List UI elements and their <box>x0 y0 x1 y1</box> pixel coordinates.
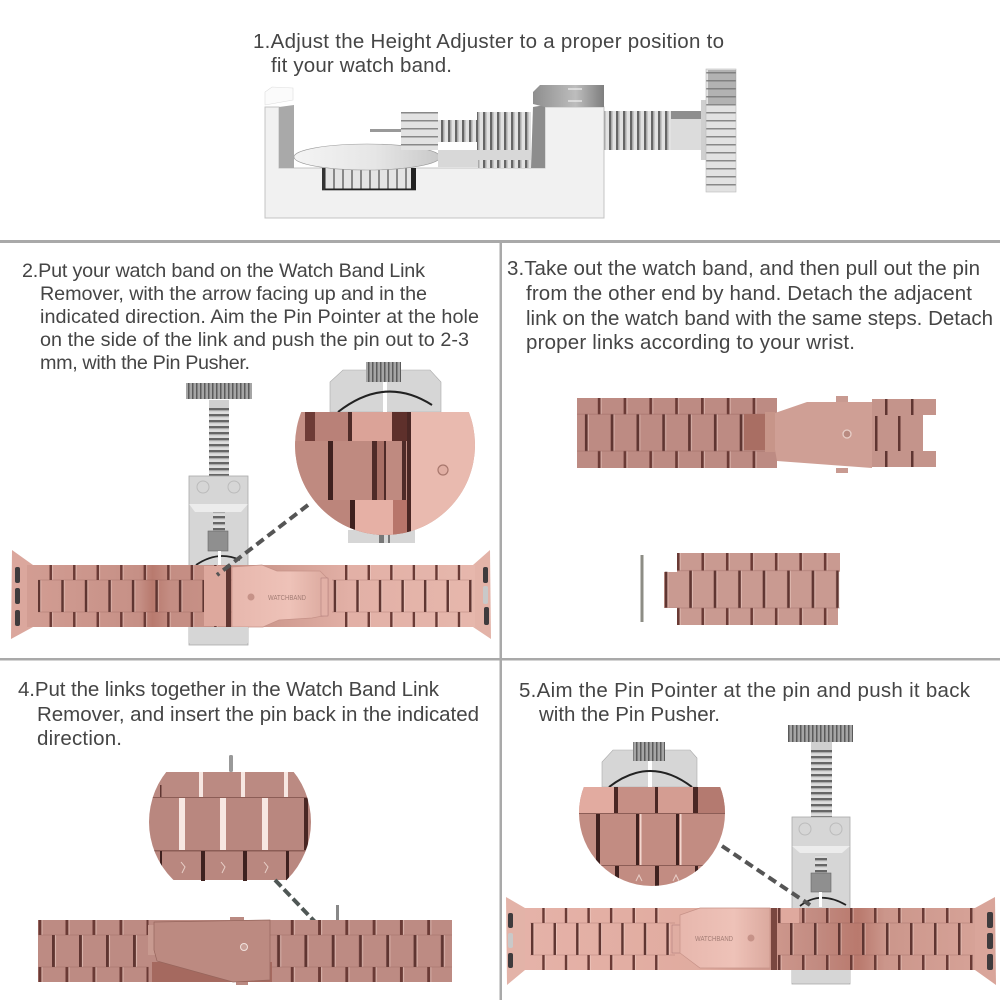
panel: step 5 <box>506 679 996 985</box>
text: step 4 instruction <box>18 678 479 750</box>
illustration: removed pin <box>640 555 644 622</box>
text: step 2 instruction: Remover, with the arrow facing up and in the <box>40 283 427 305</box>
panel: step 1 <box>253 30 736 218</box>
text: step 5 instruction: 5.Aim the Pin Pointer at the pin and push it back <box>519 679 971 702</box>
illustration: full band with clasp <box>577 396 936 473</box>
text: step 1 instruction: fit your watch band. <box>271 54 452 77</box>
illustration: watch band with clasp: WATCHBAND <box>695 936 733 943</box>
illustration: watch band with clasp <box>11 550 491 643</box>
callout: magnified links with dashed pointer <box>578 742 810 905</box>
text: step 3 instruction <box>507 257 993 354</box>
callout: magnified link with dashed pointer <box>217 362 481 575</box>
text: step 3 instruction: 3.Take out the watch band, and then pull out the pin <box>507 257 980 280</box>
panel: step 3 <box>507 257 993 625</box>
text: step 3 instruction: proper links according to your wrist. <box>526 331 855 354</box>
illustration: watch band with clasp <box>506 897 996 985</box>
illustration: link remover tool <box>788 725 853 984</box>
text: step 4 instruction: 4.Put the links together in the Watch Band Link <box>18 678 440 701</box>
text: step 2 instruction: 2.Put your watch band on the Watch Band Link <box>22 260 425 282</box>
text: step 1 instruction: 1.Adjust the Height Adjuster to a proper position to <box>253 30 724 53</box>
panel: step 4 <box>18 678 479 985</box>
illustration: watch band with clasp: WATCHBAND <box>268 595 306 602</box>
text: step 3 instruction: link on the watch band with the same steps. Detach <box>526 307 993 330</box>
text: step 1 instruction <box>253 30 724 77</box>
text: step 5 instruction: with the Pin Pusher. <box>538 703 720 726</box>
illustration: band with inserted pin <box>38 905 452 985</box>
text: step 3 instruction: from the other end by hand. Detach the adjacent <box>526 282 972 305</box>
illustration: height adjuster tool <box>265 69 736 218</box>
panel: step 2 <box>11 260 491 645</box>
callout: magnified links with pin <box>149 755 318 925</box>
illustration: link remover tool <box>186 383 252 645</box>
text: step 2 instruction: on the side of the link and push the pin out to 2-3 <box>40 329 469 351</box>
text: step 2 instruction: mm, with the Pin Pusher. <box>40 352 250 374</box>
text: step 2 instruction: indicated direction. Aim the Pin Pointer at the hole <box>40 306 479 328</box>
text: step 2 instruction <box>22 260 479 374</box>
illustration: detached links <box>664 553 840 625</box>
text: step 5 instruction <box>519 679 971 726</box>
text: step 4 instruction: Remover, and insert the pin back in the indicated <box>37 703 479 726</box>
text: step 4 instruction: direction. <box>37 727 122 750</box>
